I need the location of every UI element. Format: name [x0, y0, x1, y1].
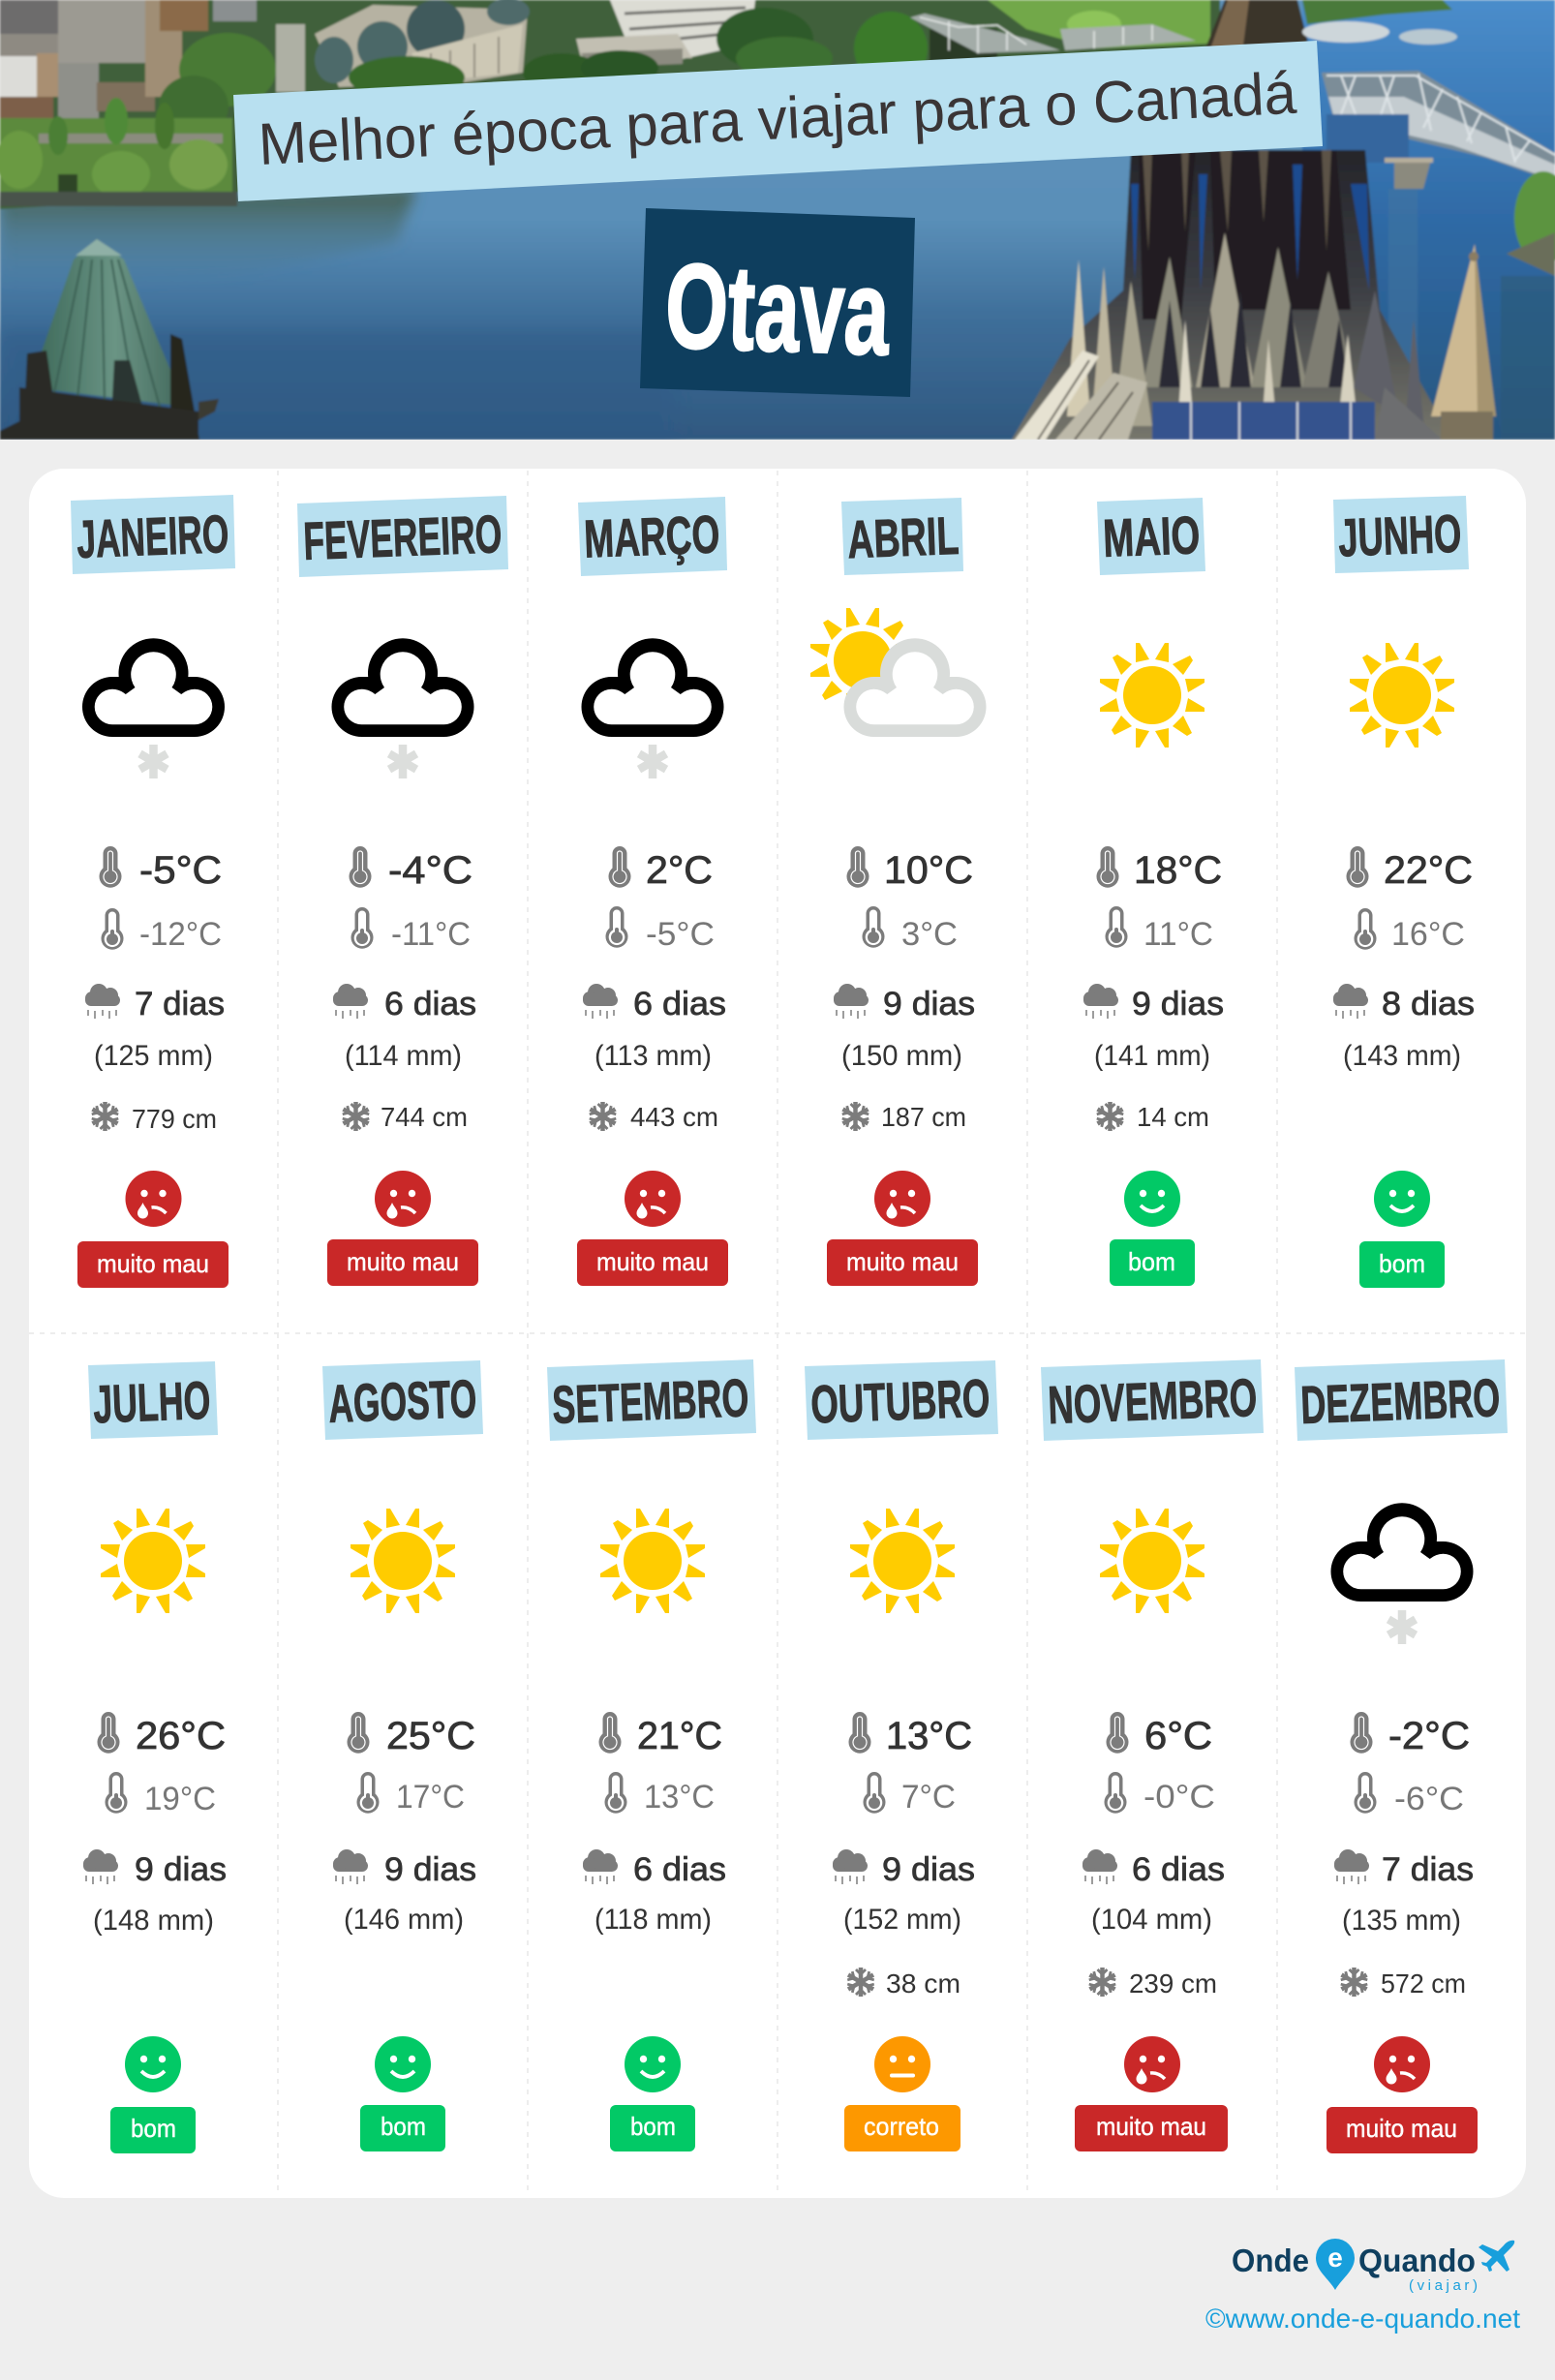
icon: low temperature — [105, 1772, 128, 1814]
heading: outubro — [805, 1360, 998, 1440]
heading: julho — [88, 1361, 218, 1439]
heading: janeiro — [71, 495, 235, 574]
icon: sun — [850, 1509, 955, 1613]
icon: sun — [1350, 643, 1454, 748]
heading: março: MARÇO — [583, 503, 720, 569]
logo: Onde e Quando viajar: ( v i a j a r ) — [1409, 2277, 1478, 2294]
rating badge: muito mau — [347, 1247, 459, 1276]
icon: high temperature — [1346, 846, 1369, 888]
snowfall: 187 cm — [881, 1102, 966, 1132]
stone pinnacle — [1429, 244, 1479, 418]
high temperature: 22°C — [1384, 849, 1473, 892]
low temperature: -11°C — [391, 916, 471, 953]
rating badge — [110, 2107, 196, 2153]
icon: map pin: e — [1327, 2243, 1343, 2273]
icon: high temperature — [848, 1712, 871, 1754]
icon: rain — [833, 1849, 868, 1884]
high temperature: 6°C — [1144, 1715, 1212, 1757]
museum of history with domes — [315, 5, 528, 87]
heading: março — [578, 497, 727, 576]
rainfall: (141 mm) — [1094, 1040, 1210, 1072]
icon: rain — [1083, 984, 1118, 1019]
header photo: Ottawa river and parliament — [0, 0, 1555, 440]
snowfall: 14 cm — [1137, 1102, 1209, 1132]
icon: rain — [834, 984, 869, 1019]
main white panel — [29, 469, 1526, 2198]
icon: sun — [600, 1509, 705, 1613]
gothic gables — [1143, 257, 1193, 387]
city name: Otava — [663, 239, 892, 381]
icon: low temperature — [351, 907, 374, 949]
heading: fevereiro: FEVEREIRO — [302, 503, 503, 571]
icon: snowflake — [1087, 1968, 1117, 1997]
low temperature: -12°C — [139, 916, 222, 953]
heading: fevereiro — [297, 496, 508, 577]
right bridge — [1322, 71, 1555, 182]
low temperature: -0°C — [1143, 1779, 1215, 1816]
heading: maio — [1097, 498, 1205, 575]
heading: setembro — [547, 1359, 756, 1441]
snowfall: 38 cm — [886, 1968, 960, 1999]
icon: low temperature — [1354, 1772, 1377, 1814]
rainy days: 9 dias — [883, 986, 975, 1022]
rainy days: 9 dias — [1132, 986, 1224, 1022]
rating badge — [1326, 2107, 1478, 2153]
icon: high temperature — [347, 1712, 370, 1754]
white stepped building — [610, 0, 755, 60]
heading: julho: JULHO — [92, 1370, 211, 1434]
icon: high temperature — [349, 846, 372, 888]
heading: agosto: AGOSTO — [327, 1368, 477, 1434]
icon: rating face — [1124, 2036, 1180, 2092]
heading: agosto — [322, 1360, 483, 1440]
website credit: ©www.onde-e-quando.net — [1205, 2304, 1520, 2334]
icon: rating face — [125, 2036, 181, 2092]
snowfall: 744 cm — [381, 1102, 468, 1132]
heading: outubro: OUTUBRO — [809, 1367, 991, 1435]
tree band on left bank — [0, 118, 232, 194]
icon: rating face — [625, 1171, 681, 1227]
icon: low temperature — [862, 906, 885, 948]
month: agosto — [322, 1360, 483, 2151]
icon: rating face — [874, 2036, 930, 2092]
high temperature: 2°C — [646, 849, 713, 892]
icon: rain — [1333, 984, 1368, 1019]
month: junho — [1333, 496, 1475, 1288]
rainy days: 7 dias — [1382, 1851, 1474, 1888]
heading: novembro — [1041, 1359, 1264, 1441]
month: setembro — [547, 1359, 756, 2151]
icon: rating face — [375, 2036, 431, 2092]
icon: low temperature — [101, 908, 124, 950]
heading: abril — [841, 498, 963, 575]
rating badge — [327, 1239, 478, 1286]
icon: map pin — [1316, 2239, 1355, 2290]
rainfall: (146 mm) — [344, 1904, 464, 1936]
left copper tower — [41, 255, 172, 405]
icon: rating face — [625, 2036, 681, 2092]
rating badge — [1359, 1241, 1445, 1288]
title text: Melhor época para viajar para o Canadá — [257, 60, 1297, 177]
rating badge: muito mau — [596, 1247, 709, 1276]
icon: rating face — [874, 1171, 930, 1227]
heading: junho: JUNHO — [1337, 503, 1462, 567]
snowfall: 443 cm — [630, 1102, 718, 1132]
icon: cloud with snow — [1330, 1503, 1474, 1644]
icon: rain — [583, 984, 618, 1019]
icon: snowflake — [840, 1102, 870, 1131]
rating badge: bom — [1379, 1249, 1425, 1278]
rating badge: bom — [1128, 1247, 1175, 1276]
high temperature: -4°C — [388, 849, 473, 892]
rainy days: 6 dias — [633, 986, 726, 1022]
icon: rain — [1082, 1849, 1117, 1884]
rating badge — [827, 1239, 978, 1286]
icon: high temperature — [608, 846, 631, 888]
dark trees mid — [523, 53, 589, 80]
icon: cloud with snow — [82, 638, 225, 778]
city bank base — [0, 0, 1220, 209]
month: outubro — [805, 1360, 998, 2151]
rating badge — [577, 1239, 728, 1286]
title banner — [233, 41, 1323, 201]
rainy days: 9 dias — [135, 1851, 227, 1888]
rating badge: correto — [864, 2112, 939, 2141]
low temperature: 16°C — [1391, 916, 1465, 953]
month: março — [577, 497, 728, 1286]
rainy days: 6 dias — [1132, 1851, 1225, 1888]
top of Peace Tower above banner — [1205, 0, 1309, 46]
icon: rating face — [1374, 2036, 1430, 2092]
month: novembro — [1041, 1359, 1264, 2151]
icon: snowflake — [846, 1968, 875, 1997]
rainy days: 6 dias — [633, 1851, 726, 1888]
month: janeiro — [71, 495, 235, 1288]
logo: Onde e Quando viajar — [1232, 2239, 1514, 2294]
icon: rain — [1334, 1849, 1369, 1884]
rating badge: bom — [630, 2112, 676, 2141]
month: dezembro — [1295, 1359, 1508, 2153]
base roof lines — [1015, 351, 1099, 440]
pinnacles — [1067, 259, 1090, 416]
icon: low temperature — [1106, 906, 1127, 948]
rating badge: bom — [131, 2114, 176, 2143]
rating badge — [360, 2105, 445, 2151]
low temperature: 13°C — [644, 1779, 715, 1816]
icon: high temperature — [1106, 1712, 1129, 1754]
icon: low temperature — [606, 906, 627, 948]
low temperature: 3°C — [901, 916, 958, 953]
icon: low temperature — [356, 1772, 380, 1814]
icon: plane — [1479, 2241, 1514, 2272]
rating badge — [610, 2105, 695, 2151]
high temperature: 21°C — [637, 1715, 722, 1757]
high temperature: 25°C — [386, 1715, 475, 1757]
rating badge — [77, 1241, 229, 1288]
heading: novembro: NOVEMBRO — [1047, 1367, 1258, 1435]
rainy days: 6 dias — [384, 986, 476, 1022]
icon: high temperature — [598, 1712, 622, 1754]
heading: junho — [1333, 496, 1469, 573]
rainfall: (114 mm) — [345, 1040, 462, 1072]
icon: snowflake — [588, 1102, 618, 1131]
icon: low temperature — [1354, 908, 1377, 950]
high temperature: 18°C — [1134, 849, 1222, 892]
month: julho — [83, 1361, 227, 2153]
icon: sun behind cloud — [810, 608, 986, 737]
rainfall: (143 mm) — [1343, 1040, 1461, 1072]
rainfall: (152 mm) — [843, 1904, 961, 1936]
icon: sun — [351, 1509, 455, 1613]
rainfall: (113 mm) — [595, 1040, 712, 1072]
rainy days: 7 dias — [135, 986, 225, 1022]
icon: rating face — [1124, 1171, 1180, 1227]
rainy days: 9 dias — [384, 1851, 476, 1888]
icon: snowflake — [341, 1102, 371, 1131]
marina and trees top right — [1302, 0, 1452, 24]
icon: low temperature — [864, 1772, 885, 1814]
high temperature: -2°C — [1388, 1715, 1470, 1757]
rainfall: (150 mm) — [841, 1040, 962, 1072]
icon: rain — [333, 1849, 368, 1884]
rating badge: muito mau — [1096, 2112, 1206, 2141]
low temperature: 19°C — [144, 1781, 216, 1817]
right trees — [1514, 171, 1555, 264]
icon: rain — [83, 1849, 118, 1884]
icon: sun — [1100, 643, 1204, 748]
lawn and top bridge — [988, 0, 1210, 48]
month: abril — [810, 498, 986, 1286]
heading: maio: MAIO — [1102, 504, 1201, 568]
rating badge — [844, 2105, 960, 2151]
rating badge — [1075, 2105, 1228, 2151]
icon: rain — [85, 984, 120, 1019]
snowfall: 239 cm — [1129, 1968, 1217, 1999]
heading: abril: ABRIL — [846, 505, 960, 569]
rating badge: bom — [381, 2112, 426, 2141]
heading: janeiro: JANEIRO — [76, 503, 229, 569]
rainfall: (135 mm) — [1342, 1905, 1461, 1937]
low temperature: 11°C — [1143, 916, 1213, 953]
rainfall: (104 mm) — [1091, 1904, 1212, 1936]
high temperature: 13°C — [886, 1715, 972, 1757]
low temperature: -6°C — [1394, 1781, 1464, 1817]
icon: cloud with snow — [331, 638, 474, 778]
rating badge: muito mau — [846, 1247, 959, 1276]
icon: rating face — [1374, 1171, 1430, 1227]
rainy days: 9 dias — [882, 1851, 975, 1888]
rating badge: muito mau — [1346, 2114, 1457, 2143]
logo: Onde e Quando viajar: Onde — [1232, 2243, 1309, 2278]
city name box — [640, 208, 915, 397]
high temperature: -5°C — [139, 849, 222, 892]
low temperature: 7°C — [901, 1779, 956, 1816]
icon: snowflake — [90, 1102, 120, 1131]
low temperature: 17°C — [396, 1779, 465, 1816]
rainy days: 8 dias — [1382, 986, 1475, 1022]
icon: sun — [1100, 1509, 1204, 1613]
icon: high temperature — [97, 1712, 120, 1754]
snowfall: 779 cm — [132, 1104, 217, 1134]
icon: snowflake — [1339, 1968, 1369, 1997]
high temperature: 10°C — [884, 849, 973, 892]
icon: high temperature — [1350, 1712, 1373, 1754]
icon: low temperature — [604, 1772, 627, 1814]
rating badge: muito mau — [97, 1249, 209, 1278]
Peace Tower body — [1012, 150, 1452, 440]
icon: high temperature — [99, 846, 122, 888]
month: fevereiro — [297, 496, 508, 1286]
high temperature: 26°C — [136, 1715, 226, 1757]
icon: cloud with snow — [581, 638, 724, 778]
low temperature: -5°C — [646, 916, 715, 953]
icon: rain — [333, 984, 368, 1019]
heading: setembro: SETEMBRO — [551, 1367, 749, 1435]
icon: rating face — [375, 1171, 431, 1227]
logo: Onde e Quando viajar: Quando — [1358, 2243, 1476, 2278]
icon: rating face — [126, 1171, 182, 1227]
icon: low temperature — [1104, 1772, 1127, 1814]
balconies — [1152, 402, 1375, 440]
rainfall: (118 mm) — [595, 1904, 712, 1936]
rating badge — [1110, 1239, 1195, 1286]
rainfall: (125 mm) — [94, 1040, 213, 1072]
month: maio — [1083, 498, 1224, 1286]
icon: rain — [583, 1849, 618, 1884]
rainfall: (148 mm) — [93, 1905, 214, 1937]
icon: snowflake — [1095, 1102, 1125, 1131]
snowfall: 572 cm — [1381, 1968, 1466, 1999]
icon: high temperature — [1096, 846, 1119, 888]
icon: sun — [101, 1509, 205, 1613]
icon: high temperature — [846, 846, 869, 888]
